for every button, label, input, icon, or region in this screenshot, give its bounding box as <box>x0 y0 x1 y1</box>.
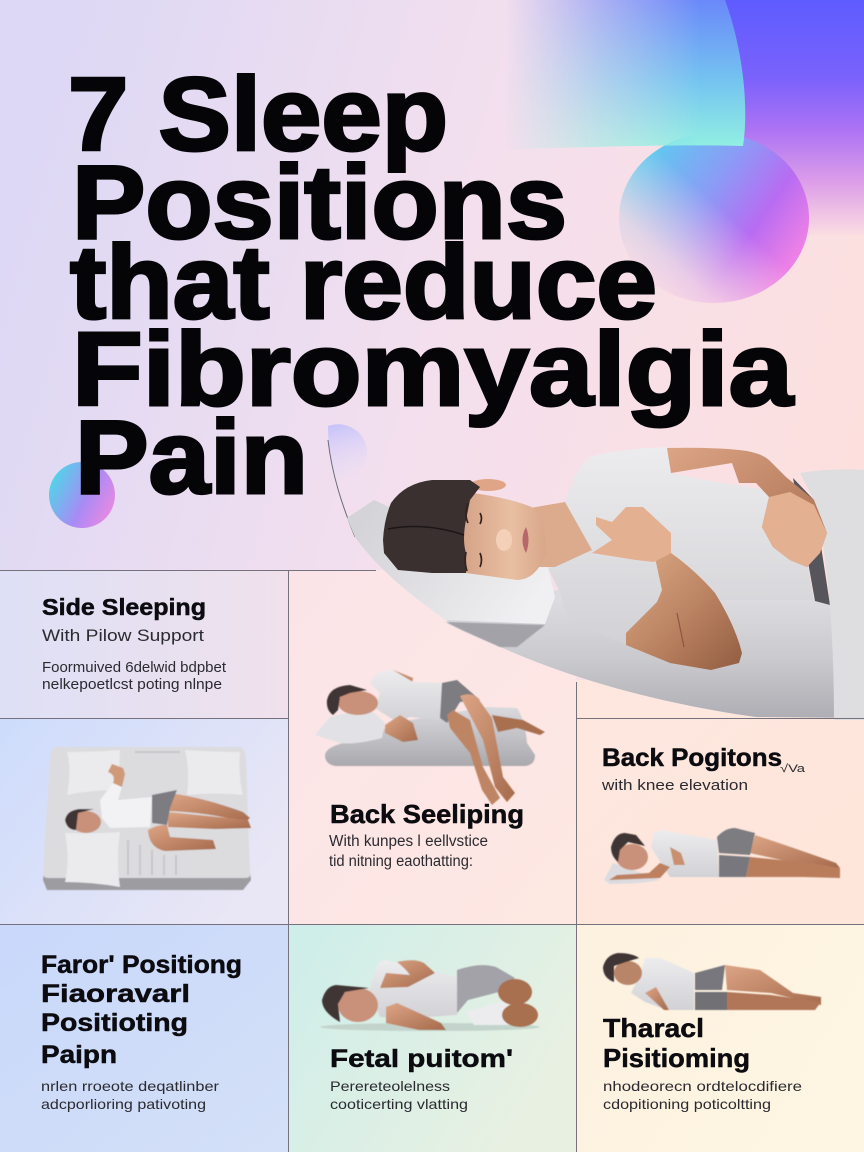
neck <box>530 502 592 567</box>
illustration: fetal position figure <box>320 960 540 1031</box>
hand highlight <box>762 492 827 567</box>
heading: back positions: Back Pogitons <box>602 744 782 772</box>
decorative gradient orb <box>618 132 810 304</box>
face <box>458 493 546 580</box>
subheading: side sleeping: With Pilow Support <box>42 626 204 645</box>
body text: side sleeping: nelkepoetlcst poting nlnpe <box>42 676 222 693</box>
heading: back sleeping: Back Seeliping <box>330 799 524 829</box>
far arm and hand <box>667 448 827 567</box>
small stray label: √Va <box>780 763 806 775</box>
closed eyes, nose and lips <box>465 503 482 571</box>
heading: side sleeping: Side Sleeping <box>42 594 206 620</box>
heading: faror positioning: Paipn <box>41 1041 117 1069</box>
heading: thoracic positioning: Tharacl <box>603 1013 704 1043</box>
body text: thoracic positioning: nhodeorecn ordtelocdifiere <box>603 1078 802 1094</box>
panel: back positions <box>576 680 864 924</box>
heading: fetal position: Fetal puitom' <box>330 1045 513 1073</box>
pillow shadow <box>446 622 545 647</box>
shorts gap <box>793 478 830 605</box>
body text: faror positioning: nrlen rroeote deqatlinber <box>41 1078 219 1094</box>
illustration: person on bed <box>43 747 251 890</box>
decorative small orb near Pain <box>49 462 115 528</box>
body text: side sleeping: Foormuived 6delwid bdpbet <box>42 659 227 676</box>
pillow <box>347 500 555 624</box>
title: 7 Sleep <box>68 57 448 173</box>
panel: side sleeping <box>0 570 288 718</box>
arm crease <box>677 613 684 647</box>
illustration: person lying on side <box>604 828 840 884</box>
ear <box>470 479 506 491</box>
heading: faror positioning: Positioting <box>41 1009 188 1037</box>
body text: back sleeping: tid nitning eaothatting: <box>329 853 473 870</box>
body text: faror positioning: adcporlioring pativoting <box>41 1096 206 1112</box>
title <box>68 57 794 516</box>
body text: thoracic positioning: cdopitioning poticoltting <box>603 1096 771 1112</box>
shirt <box>548 447 814 645</box>
title: that reduce <box>70 225 657 341</box>
arc outline <box>328 440 355 537</box>
decorative lavender orb <box>328 424 367 480</box>
body text: fetal position: cooticerting vlatting <box>330 1096 468 1112</box>
panel line right of hero <box>576 718 864 720</box>
body text: fetal position: Perereteolelness <box>330 1078 450 1094</box>
decorative gradient fan shape <box>515 0 746 148</box>
heading: faror positioning: Fiaoravarl <box>41 980 190 1008</box>
heading: thoracic positioning: Pisitioming <box>603 1043 750 1073</box>
illustration: side lying figure <box>603 953 821 1010</box>
illustration: person on pillow <box>315 670 545 805</box>
heading: faror positioning: Faror' Positiong <box>41 951 242 979</box>
title: Fibromyalgia <box>72 312 794 428</box>
panel: bed position <box>0 718 288 924</box>
front arm <box>626 553 742 670</box>
body text: back sleeping: With kunpes l eellvstice <box>329 833 488 850</box>
hair <box>383 480 480 573</box>
decorative gradient corner <box>720 0 864 235</box>
grid lines <box>0 570 864 1152</box>
mattress <box>446 590 834 718</box>
panel: back sleeping <box>288 570 576 924</box>
hair part <box>388 527 464 535</box>
front hand <box>592 507 671 562</box>
panel: faror positioning <box>0 924 288 1152</box>
title: Positions <box>72 145 567 261</box>
hero background mask <box>330 470 864 718</box>
panel: thoracic positioning <box>576 924 864 1152</box>
title: Pain <box>75 400 308 516</box>
blanket <box>800 469 864 720</box>
hero illustration: woman sleeping on pillow <box>328 440 864 720</box>
panel: fetal position <box>288 924 576 1152</box>
subheading: back positions: with knee elevation <box>601 777 748 794</box>
